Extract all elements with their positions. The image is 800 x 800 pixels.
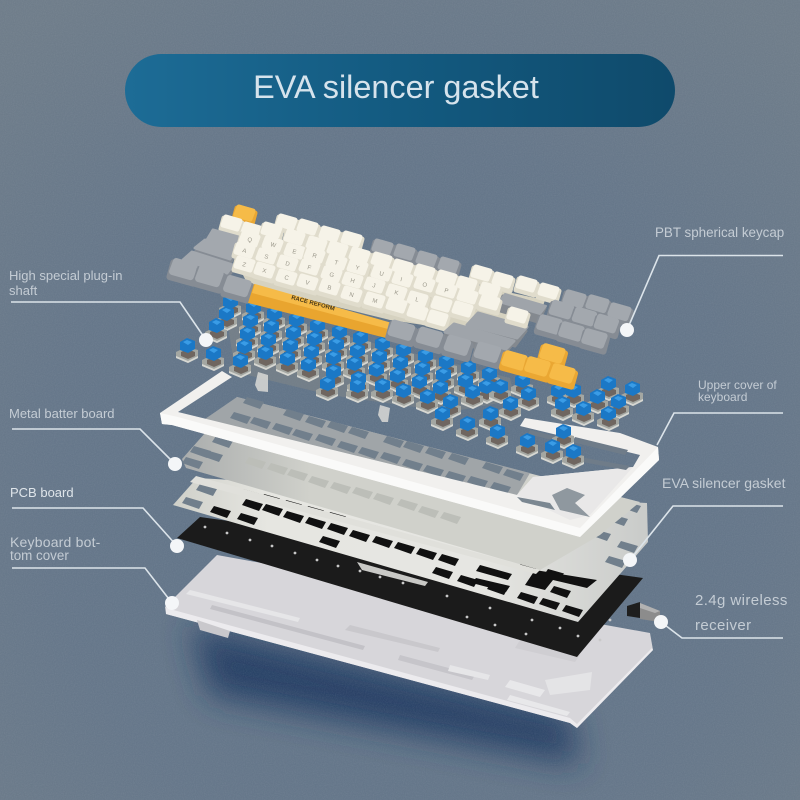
title banner: [125, 54, 675, 127]
keycap legends: L: [414, 297, 420, 304]
PCB board: [177, 517, 643, 657]
grey navigation keycaps: [537, 292, 631, 352]
keycap legends: Y: [354, 265, 360, 272]
callout: 2.4g wireless receiver: 2.4g wireless: [695, 592, 788, 609]
callout: PCB board: PCB board: [10, 485, 74, 500]
yellow arrow keycaps: [502, 346, 575, 387]
keycap legends: K: [393, 290, 399, 297]
keycap legends: U: [378, 271, 384, 278]
callout: metal batter board: Metal batter board: [9, 406, 115, 421]
keycap legends: H: [349, 278, 355, 285]
keycap legends: P: [443, 288, 449, 295]
metal batter board: [182, 397, 640, 574]
EVA silencer gasket: [173, 478, 648, 622]
keycap legends: Q: [246, 237, 253, 244]
keycap legends: [241, 237, 449, 305]
callout: metal batter board: [9, 406, 182, 471]
keycap legends: M: [371, 298, 378, 305]
keycap legends: X: [261, 268, 267, 275]
title: EVA silencer gasket: [253, 69, 539, 105]
callout: 2.4g wireless receiver: receiver: [695, 617, 752, 634]
keycap legends: T: [333, 260, 339, 267]
keycap legends: F: [306, 265, 312, 272]
keycap legends: E: [291, 249, 297, 256]
keycap legends: S: [263, 254, 269, 261]
keycap legends: D: [284, 261, 291, 268]
keycap legends: V: [304, 280, 310, 287]
upper cover of keyboard: [160, 371, 659, 537]
keycap legends: O: [421, 282, 428, 289]
keycaps: [170, 207, 631, 387]
callout: keyboard bottom cover: [10, 534, 179, 610]
callout: PBT spherical keycap: [620, 225, 784, 337]
callout: EVA silencer gasket: [623, 475, 786, 567]
callout: high special plug-in shaft: [9, 268, 213, 347]
spacebar brand: RACE REFORM: [290, 295, 335, 312]
keycap legends: C: [283, 275, 290, 282]
keycap legends: B: [326, 285, 332, 292]
callout: upper cover of keyboard: [657, 378, 783, 445]
icon: yellow escape keycap: [234, 207, 255, 224]
keycap legends: G: [328, 272, 335, 279]
callout: keyboard bottom cover: tom cover: [10, 548, 69, 563]
callout: upper cover of keyboard: Upper cover of: [698, 378, 777, 392]
callout: PBT spherical keycap: PBT spherical keycap: [655, 225, 784, 240]
keycap legends: W: [269, 242, 277, 249]
callout: EVA silencer gasket: EVA silencer gasket: [662, 475, 786, 491]
keycap legends: J: [371, 283, 376, 290]
yellow spacebar: [248, 284, 392, 338]
keycap legends: N: [348, 292, 354, 299]
callout: keyboard bottom cover: Keyboard bot-: [10, 534, 101, 550]
2.4g wireless receiver: [627, 602, 660, 622]
keycap legends: I: [399, 277, 403, 283]
keycap legends: Z: [241, 262, 247, 269]
keycap legends: R: [311, 253, 318, 260]
callout: upper cover of keyboard: keyboard: [698, 390, 747, 404]
keycap legends: A: [241, 248, 247, 255]
mechanical switches: [176, 294, 643, 469]
callout: high special plug-in shaft: High special plug-in: [9, 268, 122, 283]
callout: 2.4g wireless receiver: [654, 592, 788, 638]
callout: PCB board: [10, 485, 184, 553]
keyboard bottom cover: [165, 555, 653, 728]
callout: high special plug-in shaft: shaft: [9, 283, 38, 298]
